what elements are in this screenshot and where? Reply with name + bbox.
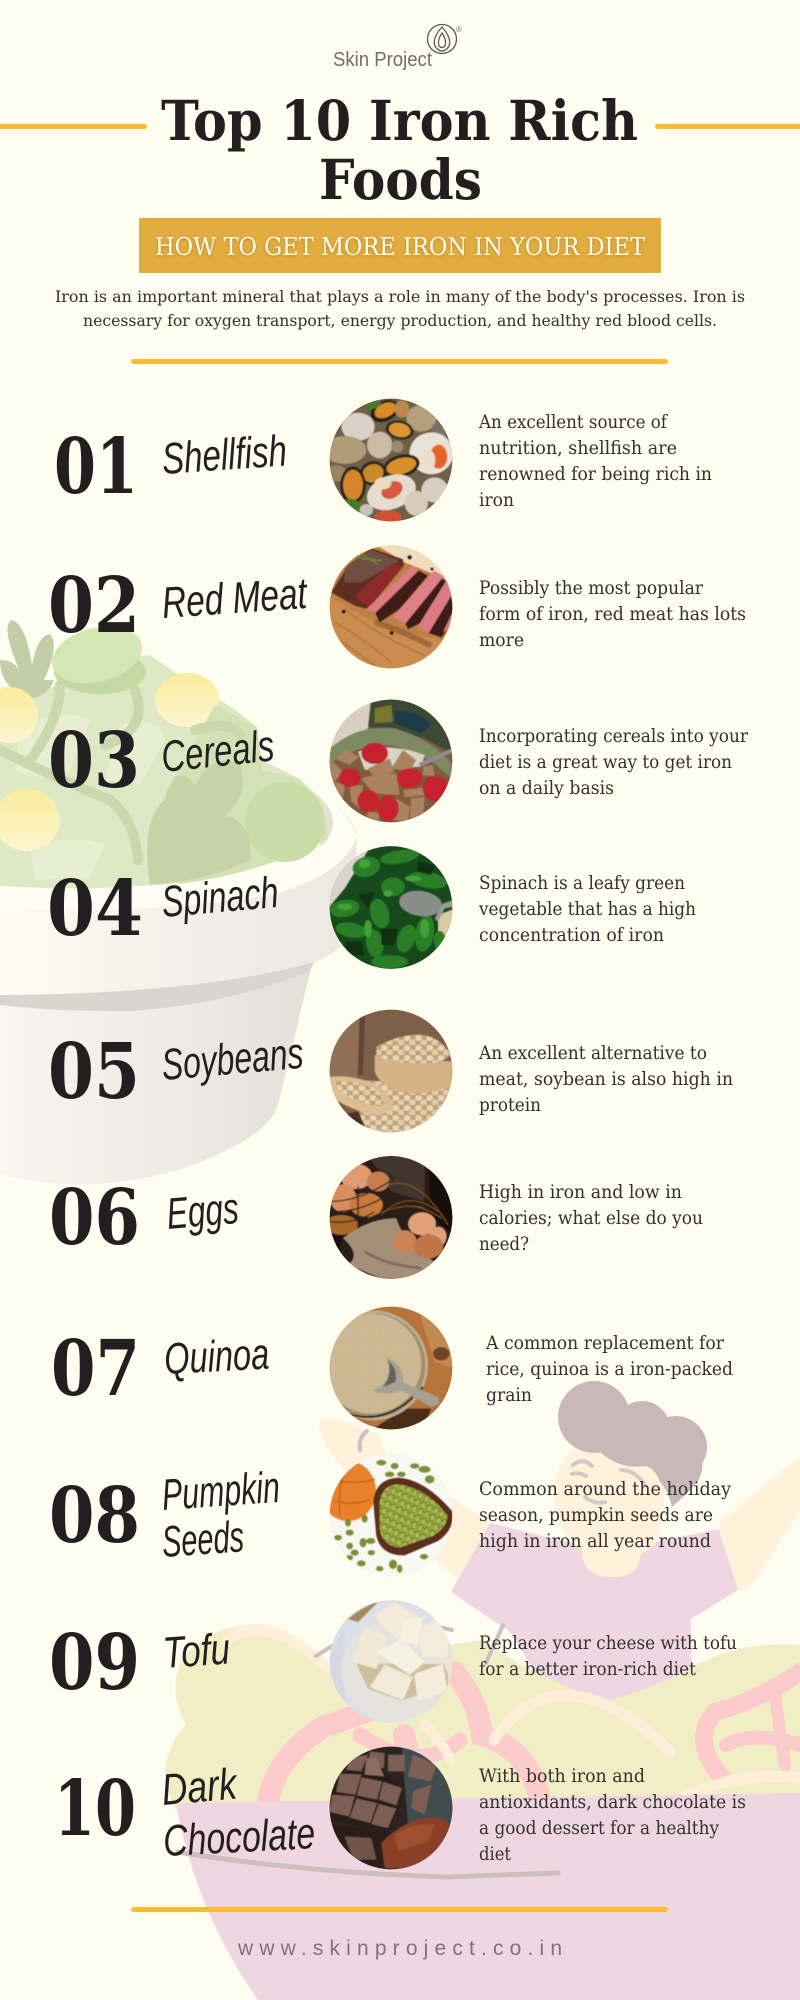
description spinach — [478, 873, 696, 946]
description pumpkin seeds: Common around the holiday — [479, 1479, 732, 1500]
photo red meat — [325, 544, 455, 672]
illustration: green backdrop and pink bowl — [165, 1523, 800, 2000]
yellow left — [0, 687, 38, 743]
description soybeans — [478, 1043, 733, 1116]
name red meat: Red Meat — [160, 569, 310, 628]
description eggs: High in iron and low in — [479, 1182, 682, 1203]
description tofu: for a better iron-rich diet — [479, 1659, 697, 1680]
bowl rim — [0, 790, 357, 995]
illustration: happy person — [316, 1381, 800, 1663]
green blob light — [46, 618, 148, 692]
parsley — [147, 760, 251, 885]
description cereals: diet is a great way to get iron — [479, 752, 732, 773]
name seeds: Seeds — [160, 1512, 245, 1567]
description shellfish — [478, 412, 712, 511]
description pumpkin seeds: high in iron all year round — [479, 1531, 711, 1552]
description red meat: form of iron, red meat has lots — [479, 604, 746, 625]
description cereals: Incorporating cereals into your — [479, 726, 748, 747]
description spinach: vegetable that has a high — [478, 899, 696, 920]
description tofu: Replace your cheese with tofu — [479, 1633, 737, 1654]
photo pumpkin seeds — [330, 1454, 452, 1574]
bowl inner shadow — [305, 788, 333, 848]
title — [0, 88, 800, 212]
description soybeans: protein — [479, 1095, 541, 1116]
name chocolate: Chocolate — [162, 1809, 316, 1866]
hair curl one — [558, 1381, 630, 1453]
yellow top — [155, 673, 219, 727]
description dark chocolate: With both iron and — [479, 1766, 645, 1787]
item 09 tofu — [49, 1598, 737, 1725]
title left rule — [0, 124, 147, 129]
salad base — [0, 655, 327, 888]
title line one: Top 10 Iron Rich — [161, 88, 638, 153]
description cereals — [479, 726, 748, 799]
yellow lower — [0, 789, 60, 851]
name pumpkin: Pumpkin — [160, 1463, 281, 1520]
number 08: 08 — [49, 1471, 140, 1561]
description soybeans: An excellent alternative to — [478, 1043, 707, 1064]
salad leaves — [0, 618, 327, 888]
bowl band shadow — [0, 960, 315, 1011]
green blob dark — [54, 650, 146, 694]
grey bowl line — [178, 1852, 558, 1877]
facial features — [572, 1461, 645, 1503]
right arm — [719, 1457, 800, 1592]
pink noodles — [267, 1672, 800, 1808]
description quinoa: A common replacement for — [485, 1333, 724, 1354]
photo tofu — [328, 1598, 454, 1725]
hair — [558, 1381, 707, 1507]
name eggs: Eggs — [165, 1184, 241, 1239]
left arm — [319, 1418, 490, 1579]
description red meat: Possibly the most popular — [479, 578, 703, 599]
description spinach: concentration of iron — [479, 925, 664, 946]
number 04: 04 — [47, 864, 143, 954]
green food mass — [165, 1625, 800, 1810]
description pumpkin seeds: season, pumpkin seeds are — [479, 1505, 713, 1526]
number 09: 09 — [49, 1618, 140, 1708]
description dark chocolate — [479, 1766, 746, 1865]
item 06 eggs — [49, 1154, 703, 1281]
description soybeans: meat, soybean is also high in — [479, 1069, 733, 1090]
item 01 shellfish — [54, 396, 712, 523]
description quinoa — [485, 1333, 733, 1406]
number 05: 05 — [48, 1027, 140, 1117]
hand detail — [360, 1431, 367, 1450]
hair side — [600, 1440, 702, 1507]
description quinoa: rice, quinoa is a iron-packed — [486, 1359, 733, 1380]
green mid — [156, 705, 327, 884]
number 03: 03 — [48, 716, 140, 806]
description tofu — [479, 1633, 737, 1680]
description dark chocolate: diet — [479, 1844, 511, 1865]
number 06: 06 — [49, 1173, 140, 1263]
description red meat: more — [479, 630, 524, 651]
bottom divider — [131, 1907, 668, 1912]
name spinach: Spinach — [160, 868, 280, 927]
name tofu: Tofu — [161, 1624, 232, 1678]
name shellfish: Shellfish — [160, 426, 288, 484]
face and neck — [554, 1446, 664, 1577]
registered mark: ® — [456, 25, 462, 34]
description quinoa: grain — [486, 1385, 532, 1406]
description pumpkin seeds — [479, 1479, 732, 1552]
illustration: salad bowl — [0, 618, 357, 1184]
item 07 quinoa — [51, 1305, 733, 1432]
item 08 pumpkin seeds — [49, 1452, 732, 1578]
photo cereals — [325, 695, 455, 824]
sage sprig — [0, 620, 54, 698]
name cereals: Cereals — [159, 721, 276, 782]
description spinach: Spinach is a leafy green — [479, 873, 685, 894]
number 10: 10 — [54, 1764, 136, 1854]
description shellfish: An excellent source of — [478, 412, 668, 433]
photo quinoa — [330, 1306, 452, 1430]
logo — [333, 24, 462, 71]
item 02 red meat — [48, 544, 746, 672]
intro line one: Iron is an important mineral that plays a role in many of the body's processes. Iron is — [55, 287, 745, 306]
description dark chocolate: antioxidants, dark chocolate is — [479, 1792, 746, 1813]
photo dark chocolate — [328, 1745, 455, 1871]
photo shellfish — [323, 396, 454, 523]
photo eggs — [330, 1156, 452, 1279]
bowl body — [0, 960, 313, 1184]
description shellfish: nutrition, shellfish are — [479, 438, 677, 459]
hair curl three — [645, 1416, 707, 1478]
description shellfish: renowned for being rich in — [479, 464, 712, 485]
photo spinach — [328, 844, 455, 975]
cream noodles — [228, 1630, 800, 1800]
chopstick left — [316, 1627, 452, 1656]
number 07: 07 — [51, 1324, 140, 1414]
item 05 soybeans — [48, 1005, 733, 1138]
description shellfish: iron — [479, 490, 514, 511]
banner text: HOW TO GET MORE IRON IN YOUR DIET — [155, 232, 646, 261]
logo emblem — [428, 24, 456, 54]
chopstick right — [486, 1625, 503, 1663]
shirt — [451, 1523, 738, 1710]
pink bowl — [176, 1793, 800, 2000]
logo wordmark: Skin Project — [333, 49, 432, 71]
title line two: Foods — [319, 147, 482, 212]
number 01: 01 — [54, 422, 138, 512]
hair curl two — [614, 1401, 670, 1457]
description cereals: on a daily basis — [479, 778, 614, 799]
name quinoa: Quinoa — [163, 1330, 270, 1384]
description red meat — [479, 578, 746, 651]
name dark: Dark — [160, 1759, 240, 1815]
description eggs — [479, 1182, 703, 1255]
item 04 spinach — [47, 844, 696, 975]
photo soybeans — [330, 1010, 452, 1132]
bowl rim lip — [0, 794, 357, 910]
description eggs: need? — [479, 1234, 529, 1255]
website url: www.skinproject.co.in — [237, 1937, 562, 1960]
green big right — [245, 782, 325, 862]
item 03 cereals — [48, 695, 748, 824]
number 02: 02 — [48, 561, 140, 651]
intro text — [55, 287, 745, 330]
description dark chocolate: a good dessert for a healthy — [479, 1818, 719, 1839]
stems — [0, 685, 240, 860]
top divider — [131, 359, 668, 364]
subtitle banner — [139, 218, 661, 273]
title right rule — [655, 124, 800, 129]
intro line two: necessary for oxygen transport, energy production, and healthy red blood cells. — [83, 311, 717, 330]
item 10 dark chocolate — [54, 1745, 746, 1871]
description eggs: calories; what else do you — [479, 1208, 703, 1229]
banner box — [139, 218, 661, 273]
pale patches — [15, 714, 165, 880]
name soybeans: Soybeans — [160, 1029, 305, 1090]
